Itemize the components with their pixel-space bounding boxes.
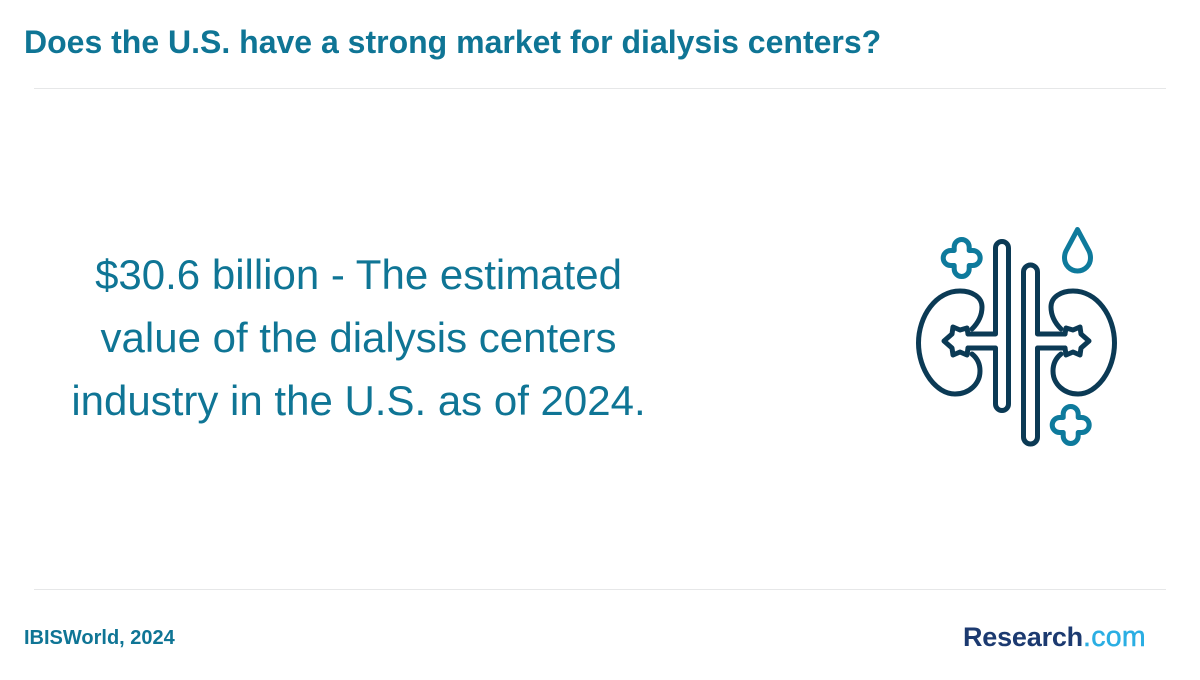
main statistic text: value of the dialysis centers [101, 314, 616, 361]
main statistic text [71, 251, 646, 424]
source: IBISWorld, 2024 [24, 627, 175, 649]
title: Does the U.S. have a strong market for dialysis centers? [24, 24, 881, 60]
main statistic text: industry in the U.S. as of 2024. [71, 377, 646, 424]
icon: top-left medical cross [943, 240, 980, 276]
icon: left kidney [918, 242, 1008, 410]
icon: right kidney [1024, 265, 1114, 444]
icon: kidneys with ureters, medical crosses and water drop [916, 227, 1117, 446]
main statistic text: $30.6 billion - The estimated [95, 251, 622, 298]
logo: Research.com: Research.com [963, 621, 1146, 653]
icon: bottom-right medical cross [1052, 406, 1089, 444]
icon: water drop [1064, 230, 1090, 271]
